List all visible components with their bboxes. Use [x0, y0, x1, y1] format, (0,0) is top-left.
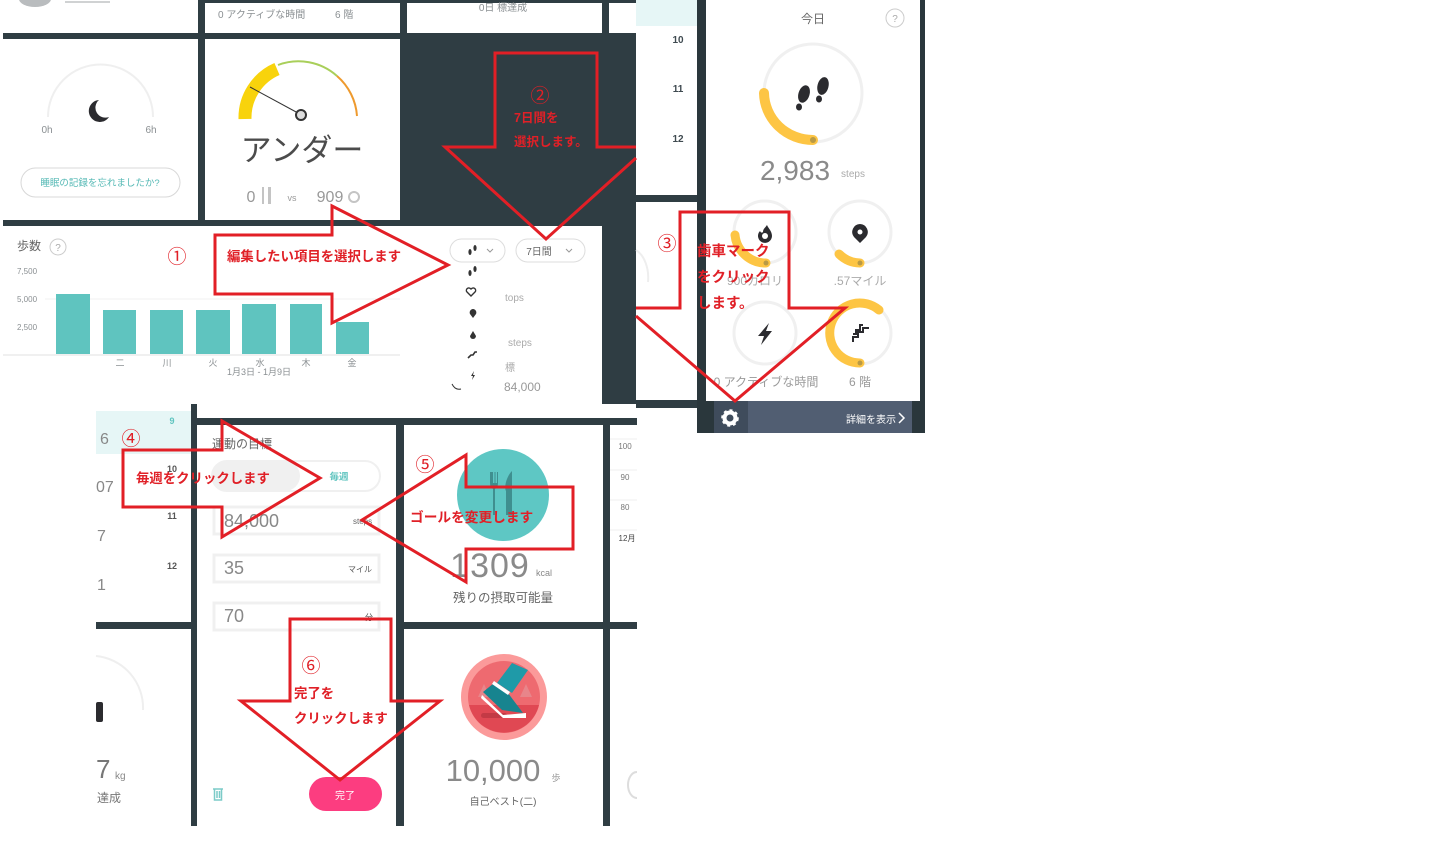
- panel: right edge chart card: 80: [621, 503, 630, 512]
- arrow: step 3 click gear: します。: [697, 295, 754, 312]
- panel: steps goal badge card: [446, 654, 561, 808]
- input: steps: 84,000: [224, 511, 279, 531]
- footer bar: 詳細を表示: [846, 413, 896, 426]
- panel: right edge chart card: 100: [618, 442, 632, 451]
- toggle daily weekly: [212, 461, 380, 491]
- arrow: step 1 select item: [167, 206, 448, 323]
- arrow: step 3 click gear: [636, 212, 845, 401]
- panel: exercise goal form: [212, 437, 382, 811]
- button: done: 完了: [335, 790, 355, 802]
- arrow: step 5 change goal: [362, 454, 573, 582]
- arrow: step 2 choose 7 days: ②: [530, 85, 550, 107]
- panel: sleep gauge card: 睡眠の記録を忘れましたか?: [40, 177, 160, 189]
- panel: calorie balance gauge card: [205, 39, 400, 220]
- icon: gear: [722, 410, 738, 426]
- panel: steps bar chart card: [3, 226, 602, 404]
- panel: steps bar chart card: 84,000: [504, 380, 541, 394]
- input: steps: [214, 507, 379, 534]
- panel: sleep gauge card: [3, 39, 198, 220]
- panel: calendar column left: 07: [96, 479, 114, 496]
- panel: steps goal badge card: 10,000: [446, 753, 540, 788]
- panel: steps bar chart card: 水: [255, 357, 265, 368]
- panel: top dashboard screenshot: 0 アクティブな時間: [218, 8, 305, 21]
- panel: sleep gauge card: 0h: [41, 125, 53, 136]
- panel: steps bar chart card: steps: [508, 338, 532, 349]
- ring: distance: [829, 201, 891, 266]
- panel: today's stats sidebar: 900カロリ: [727, 274, 783, 288]
- dropdown: 7 days: 7日間: [526, 246, 552, 258]
- icon: cutlery: [262, 187, 271, 204]
- toggle daily weekly: 毎週: [329, 471, 349, 483]
- panel: calendar column left: 11: [167, 511, 177, 521]
- panel: remaining calories card: 残りの摂取可能量: [453, 590, 553, 605]
- panel: left-side calendar column: 11: [673, 84, 684, 95]
- panel: remaining calories card: kcal: [536, 568, 552, 578]
- panel: today's stats sidebar: 6 階: [849, 375, 871, 389]
- panel: calendar column left: kg: [115, 771, 126, 782]
- panel: calorie balance gauge card: アンダー: [241, 133, 363, 168]
- input: minutes: 分: [365, 613, 373, 622]
- panel: top dashboard screenshot: [3, 0, 637, 404]
- input: minutes: 70: [224, 606, 244, 626]
- panel: steps bar chart card: 歩数: [17, 238, 41, 253]
- panel: calendar column left: [96, 411, 191, 805]
- panel: calendar column left: 12: [167, 561, 177, 571]
- input: miles: [214, 555, 379, 582]
- arrow: step 6 click done: クリックします: [294, 711, 388, 726]
- panel: today's stats sidebar: steps: [841, 169, 865, 180]
- arrow: step 4 click weekly: [121, 421, 320, 537]
- panel: steps bar chart card: 2,500: [17, 323, 38, 332]
- panel: steps bar chart card: 7,500: [17, 267, 38, 276]
- arrow: step 2 choose 7 days: 7日間を: [514, 111, 558, 125]
- panel: steps bar chart card: 5,000: [17, 295, 38, 304]
- icon: running shoe badge: [461, 654, 547, 740]
- panel: steps bar chart card: 川: [162, 358, 172, 368]
- panel: steps goal badge card: 歩: [551, 772, 561, 783]
- panel: steps bar chart card: 金: [347, 357, 357, 368]
- ring: steps: [764, 44, 862, 143]
- arrow: step 6 click done: ⑥: [301, 655, 321, 677]
- ring: active minutes: [734, 302, 796, 364]
- panel: today's stats sidebar: 0 アクティブな時間: [714, 374, 818, 389]
- panel: right edge chart card: 90: [621, 473, 630, 482]
- ring: calories: [734, 201, 796, 266]
- arrow: step 2 choose 7 days: 選択します。: [514, 134, 588, 149]
- icon: stairs: [853, 325, 869, 342]
- panel: today's stats sidebar: 今日: [801, 11, 825, 26]
- panel: calendar column left: 9: [169, 416, 175, 426]
- ring: floors: [829, 302, 891, 366]
- panel: remaining calories card: 1309: [450, 547, 530, 585]
- panel: left-side calendar column: 12: [672, 134, 684, 145]
- arrow: step 5 change goal: ⑤: [415, 454, 435, 476]
- icon: moon: [89, 100, 109, 122]
- arrow: step 3 click gear: ③: [657, 233, 677, 255]
- panel: calorie balance gauge card: 909: [317, 189, 343, 206]
- panel: steps bar chart card: 標: [505, 361, 515, 374]
- panel: top dashboard screenshot: 0日 標達成: [479, 1, 527, 14]
- panel: today's stats sidebar: 2,983: [760, 155, 830, 186]
- panel: calendar column left: 10: [167, 464, 177, 474]
- panel: calendar column left: 7: [96, 754, 110, 784]
- input: miles: 35: [224, 558, 244, 578]
- icon: trash: [213, 789, 223, 800]
- panel: left-side calendar column: 10: [672, 35, 684, 46]
- panel: remaining calories card: [450, 449, 553, 605]
- panel: today's stats sidebar: [697, 0, 925, 433]
- panel: calendar column left: 1: [97, 577, 106, 594]
- arrow: step 3 click gear: 歯車マーク: [697, 242, 770, 260]
- input: miles: マイル: [348, 565, 372, 574]
- arrow: step 4 click weekly: 毎週をクリックします: [136, 471, 270, 486]
- panel: steps bar chart card: 木: [301, 357, 311, 368]
- panel: steps bar chart card: tops: [505, 293, 524, 304]
- panel: calendar column left: 6: [100, 431, 109, 448]
- panel: calorie balance gauge card: 0: [247, 189, 256, 206]
- panel: sleep gauge card: 6h: [145, 125, 157, 136]
- panel: calendar column left: 達成: [97, 791, 121, 805]
- panel: bottom screenshot background: [96, 404, 637, 826]
- icon: flame: [758, 225, 772, 243]
- panel: steps goal badge card: 自己ベスト(二): [470, 795, 536, 808]
- arrow: step 1 select item: 編集したい項目を選択します: [227, 248, 401, 264]
- panel: right edge chart card: [610, 439, 637, 798]
- panel: today's stats sidebar: .57マイル: [834, 274, 886, 288]
- arrow: step 1 select item: ①: [167, 246, 187, 268]
- panel: steps bar chart card: 二: [115, 358, 125, 368]
- arrow: step 6 click done: [241, 619, 440, 780]
- button: done: [309, 777, 382, 811]
- input: steps: steps: [353, 517, 372, 526]
- panel: steps bar chart card: 1月3日 - 1月9日: [227, 367, 291, 377]
- panel: today's stats sidebar: ?: [892, 14, 898, 25]
- arrow: step 5 change goal: ゴールを変更します: [410, 509, 533, 525]
- panel: calendar column left: 7: [97, 528, 106, 545]
- panel: exercise goal form: 運動の目標: [212, 437, 272, 451]
- panel: steps bar chart card: 火: [208, 358, 218, 368]
- dropdown: metric: [450, 239, 505, 262]
- panel: left-side calendar column: [636, 0, 697, 408]
- arrow: step 4 click weekly: ④: [121, 428, 141, 450]
- footer bar: [714, 401, 912, 433]
- arrow: step 3 click gear: をクリック: [697, 269, 770, 286]
- bar chart: [56, 294, 369, 355]
- icon: fork and knife on teal circle: [457, 449, 549, 541]
- dropdown menu icons: [466, 266, 477, 380]
- panel: right edge chart card: 12月: [619, 534, 635, 543]
- arrow: step 6 click done: 完了を: [294, 685, 334, 701]
- icon: flame: [349, 192, 359, 202]
- dropdown: 7 days: [516, 239, 585, 262]
- panel: calorie balance gauge card: vs: [288, 193, 297, 203]
- arrow: step 2 choose 7 days: [445, 53, 636, 239]
- panel: steps bar chart card: ?: [55, 243, 61, 254]
- input: minutes: [214, 603, 379, 630]
- panel: top dashboard screenshot: 6 階: [335, 9, 353, 21]
- icon: footprints: [796, 76, 831, 110]
